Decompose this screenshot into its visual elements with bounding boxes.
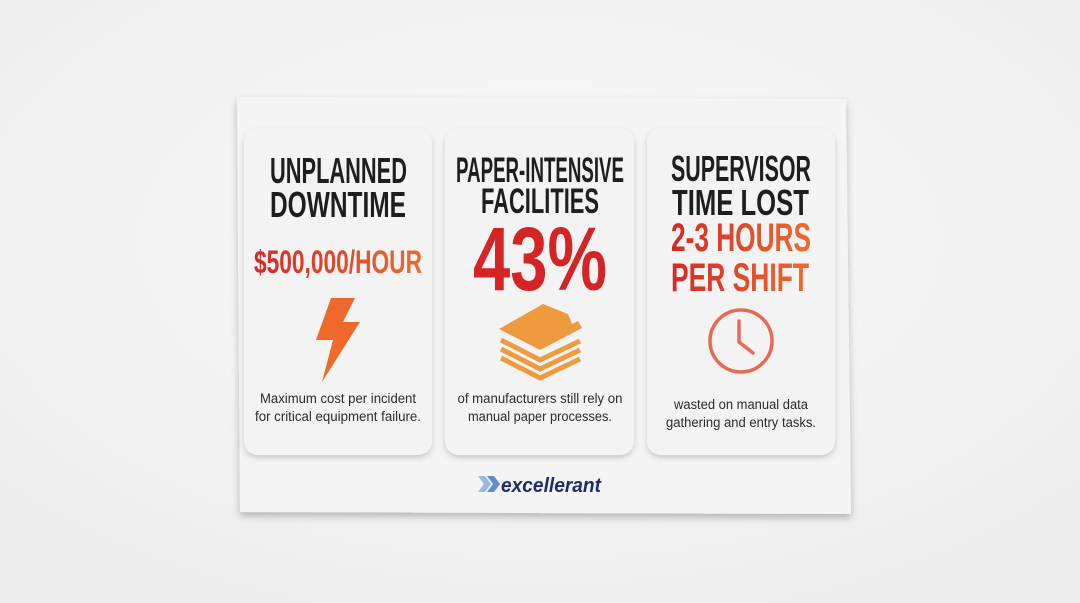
heading (671, 148, 811, 223)
description (255, 391, 421, 424)
stat (671, 216, 811, 300)
heading (456, 151, 624, 221)
icon: lightning (316, 298, 360, 382)
stat: $500,000/HOUR (254, 244, 422, 280)
heading: DOWNTIME (270, 184, 406, 225)
heading: UNPLANNED (270, 150, 407, 191)
stat: PER SHIFT (671, 256, 809, 300)
heading: PAPER-INTENSIVE (456, 151, 624, 190)
description (458, 391, 622, 424)
heading: FACILITIES (481, 182, 599, 221)
description: Maximum cost per incident (260, 391, 416, 406)
heading: SUPERVISOR (671, 148, 811, 189)
description (666, 397, 816, 430)
heading (270, 150, 407, 225)
panel: unplanned downtime (244, 128, 432, 455)
paper sheet (237, 97, 851, 514)
panel: paper-intensive (445, 128, 634, 455)
icon: clock (710, 310, 772, 372)
panel: supervisor time lost (647, 128, 835, 455)
stat: 2-3 HOURS (671, 216, 811, 260)
heading: TIME LOST (672, 182, 809, 223)
description: gathering and entry tasks. (666, 415, 816, 430)
description: wasted on manual data (673, 397, 808, 412)
description: manual paper processes. (468, 409, 612, 424)
logo: excellerant: excellerant (501, 475, 602, 497)
description: of manufacturers still rely on (458, 391, 622, 406)
icon: paper stack (499, 304, 582, 378)
stat: 43% (473, 210, 607, 310)
description: for critical equipment failure. (255, 409, 421, 424)
